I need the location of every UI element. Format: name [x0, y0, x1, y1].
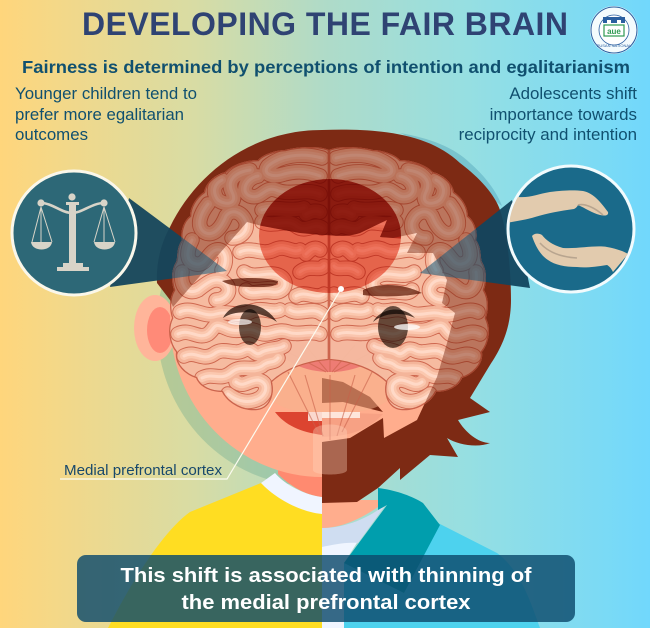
title: DEVELOPING THE FAIR BRAIN — [82, 6, 568, 42]
callout line: medial prefrontal cortex — [60, 286, 344, 479]
character illustration — [108, 130, 540, 628]
hair showing through brain — [170, 147, 489, 404]
shirt: child yellow — [108, 470, 322, 628]
left eye — [222, 278, 278, 345]
left text block — [15, 85, 197, 144]
face — [170, 163, 474, 477]
upper hand — [509, 190, 608, 222]
left text block: prefer more egalitarian — [15, 106, 184, 124]
right text block — [459, 84, 637, 144]
right text block: importance towards — [490, 105, 637, 124]
mouth — [275, 412, 383, 437]
icon: scales of justice — [12, 171, 136, 295]
lower fan — [266, 334, 393, 474]
eyes and brows — [222, 278, 422, 348]
beam: hands to brain — [420, 200, 530, 288]
right text block: Adolescents shift — [509, 84, 637, 103]
bottom summary panel: This shift is associated with thinning of — [120, 564, 532, 587]
logo: university seal — [590, 6, 638, 54]
right eye — [363, 285, 422, 348]
right text block: reciprocity and intention — [459, 125, 637, 144]
mustache — [322, 378, 383, 412]
beam tint over brain — [172, 228, 486, 282]
bottom summary panel — [77, 555, 575, 622]
brain folds — [169, 147, 489, 410]
logo: university seal: aue — [607, 27, 621, 36]
logo: university seal: PUSAN NATIONAL — [597, 43, 632, 48]
left text block: outcomes — [15, 126, 88, 144]
subtitle: Fairness is determined by perceptions of intention and egalitarianism — [22, 57, 630, 77]
callout label: Medial prefrontal cortex — [64, 463, 223, 479]
connector beams — [110, 198, 530, 288]
left hair — [157, 130, 322, 307]
ear — [134, 295, 176, 361]
brain — [169, 147, 489, 410]
beam: scales to brain — [110, 198, 227, 287]
medial prefrontal highlight — [259, 179, 401, 293]
bottom summary panel: the medial prefrontal cortex — [182, 591, 471, 614]
right hair and beard — [322, 130, 511, 503]
shirt: teen jacket — [322, 488, 540, 628]
lower hand — [532, 234, 628, 272]
icon: two hands — [500, 166, 634, 292]
left text block: Younger children tend to — [15, 85, 197, 103]
head shadow — [157, 133, 502, 486]
